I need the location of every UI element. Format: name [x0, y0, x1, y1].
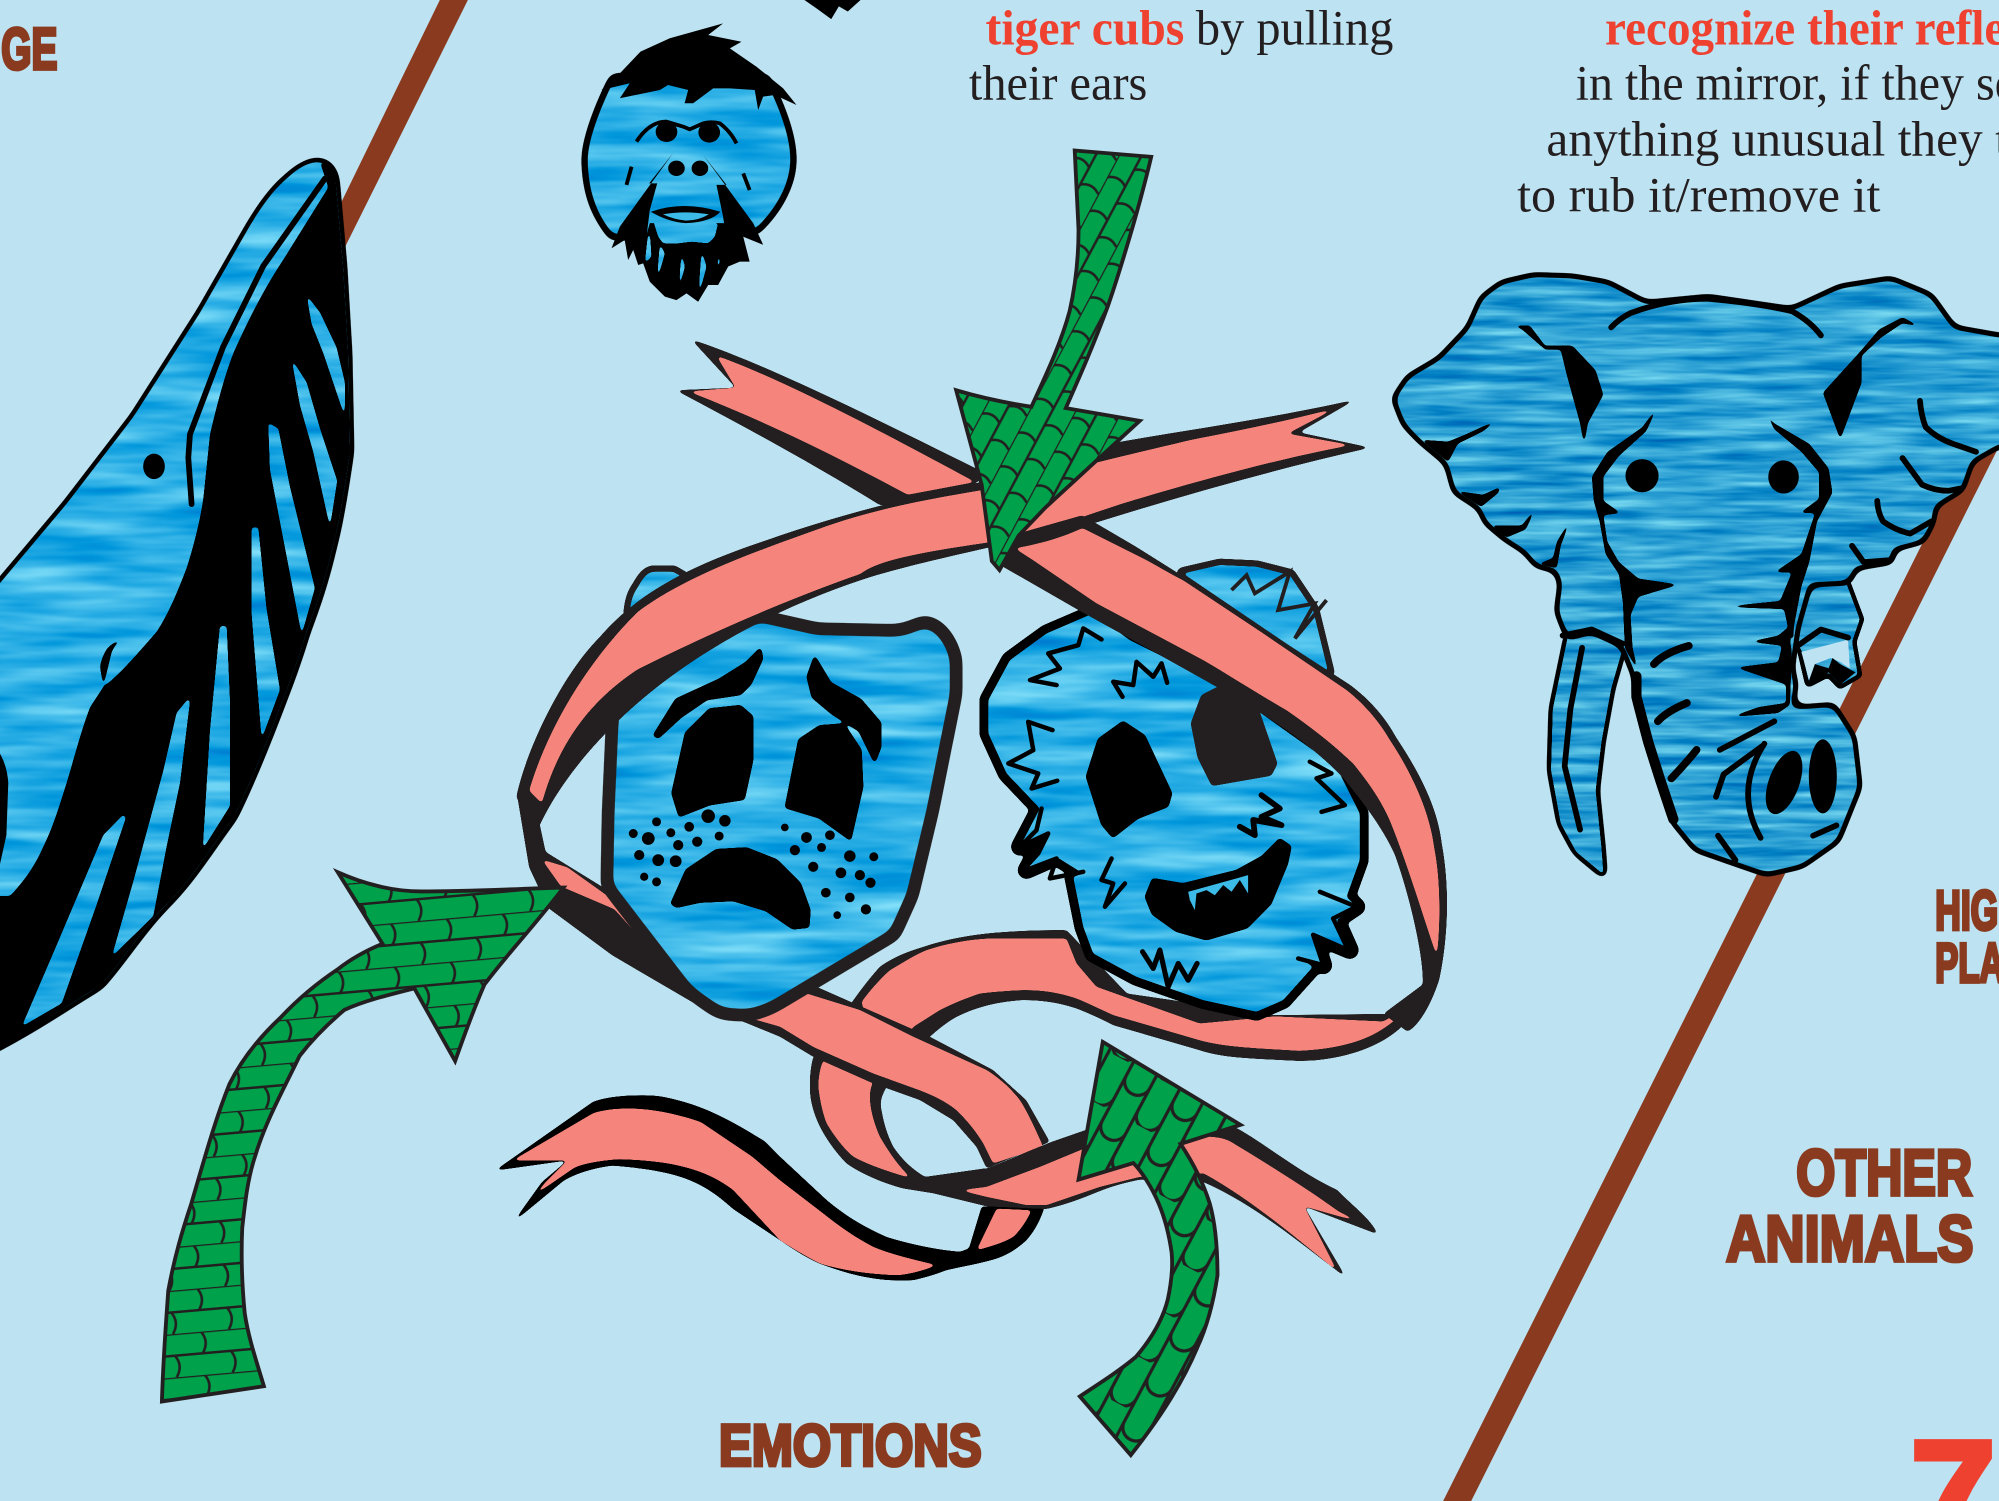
- whale eye: [143, 454, 165, 479]
- brown divider line: right: [1443, 421, 1999, 1501]
- elephant eyes: [1625, 459, 1659, 492]
- happy mask face: [988, 613, 1360, 1012]
- happy mask scratches: [1008, 628, 1356, 987]
- arrow: top down to ribbon knot: [956, 150, 1151, 570]
- elephant stump gap: [1801, 640, 1850, 680]
- happy mask eyes: [1088, 688, 1275, 835]
- whale left fluke blob: [0, 754, 8, 864]
- whale inner line: [188, 179, 325, 504]
- icon: elephant: [1396, 277, 1999, 874]
- orangutan chin and beard slits: [645, 215, 728, 298]
- elephant tusk inner line: [1565, 648, 1582, 830]
- elephant wrinkles: [1563, 299, 1976, 860]
- text block: tiger cubs: by pulling: [1196, 1, 1393, 56]
- sad mask face: [613, 622, 950, 1009]
- sad mask mouth: [672, 848, 810, 928]
- arrow: left curved up to sad mask: [162, 872, 563, 1402]
- icon: orangutan head: [588, 23, 797, 302]
- sad mask ear: [630, 572, 685, 612]
- ribbon: arch over sad mask: [516, 399, 1370, 835]
- elephant stump jag: [1809, 658, 1856, 685]
- orangutan cheek wedges: [612, 153, 673, 265]
- elephant nostrils: [1758, 746, 1810, 819]
- icon: animal silhouette tip: [804, 0, 861, 19]
- ribbon: bottom strip and right tail: [903, 1127, 1378, 1278]
- whale stripes: [22, 295, 345, 1027]
- ribbon: loop under happy mask: [810, 930, 1415, 1205]
- icon: happy mask: [988, 565, 1360, 1012]
- happy mask mouth: [1146, 840, 1290, 939]
- brown divider line: left: [319, 0, 468, 249]
- orangutan hair: [601, 23, 797, 110]
- whale dark underside: [0, 162, 350, 1050]
- sad mask freckles: [629, 809, 878, 919]
- ribbon: upper left tail: [676, 339, 988, 510]
- ribbon: right sweep over happy mask: [988, 515, 1447, 1032]
- orangutan eyes and brow: [656, 122, 677, 142]
- icon: whale: [0, 162, 350, 1056]
- text block: tiger cubs: their ears: [969, 55, 1147, 110]
- orangutan beard: [638, 223, 740, 302]
- happy mask ear marks: [1232, 572, 1327, 638]
- elephant ear marks: [1421, 317, 1922, 717]
- ribbon: lower wave tail: [495, 1095, 1045, 1280]
- happy mask ear: [1183, 565, 1328, 672]
- text block: mirror recognition: [1517, 1, 1999, 223]
- orangutan mouth: [651, 206, 720, 223]
- heading: age fragment: GE: [1, 17, 57, 82]
- heading: emotions: EMOTIONS: [719, 1413, 982, 1478]
- happy mask teeth: [1188, 875, 1248, 910]
- text block: mirror recognition: to rub it/remove it: [1517, 168, 1881, 223]
- arrow: lower right up into ribbon: [1079, 1042, 1240, 1455]
- icon: sad mask: [613, 572, 950, 1009]
- sad mask brows and eyes: [655, 650, 880, 838]
- text block: tiger cubs: [969, 1, 1393, 110]
- orangutan nose: [668, 161, 685, 176]
- ribbon: lower left strand: [516, 791, 1050, 1169]
- heading: other animals: [1726, 1136, 1974, 1275]
- text block: tiger cubs: tiger cubs: [985, 1, 1184, 56]
